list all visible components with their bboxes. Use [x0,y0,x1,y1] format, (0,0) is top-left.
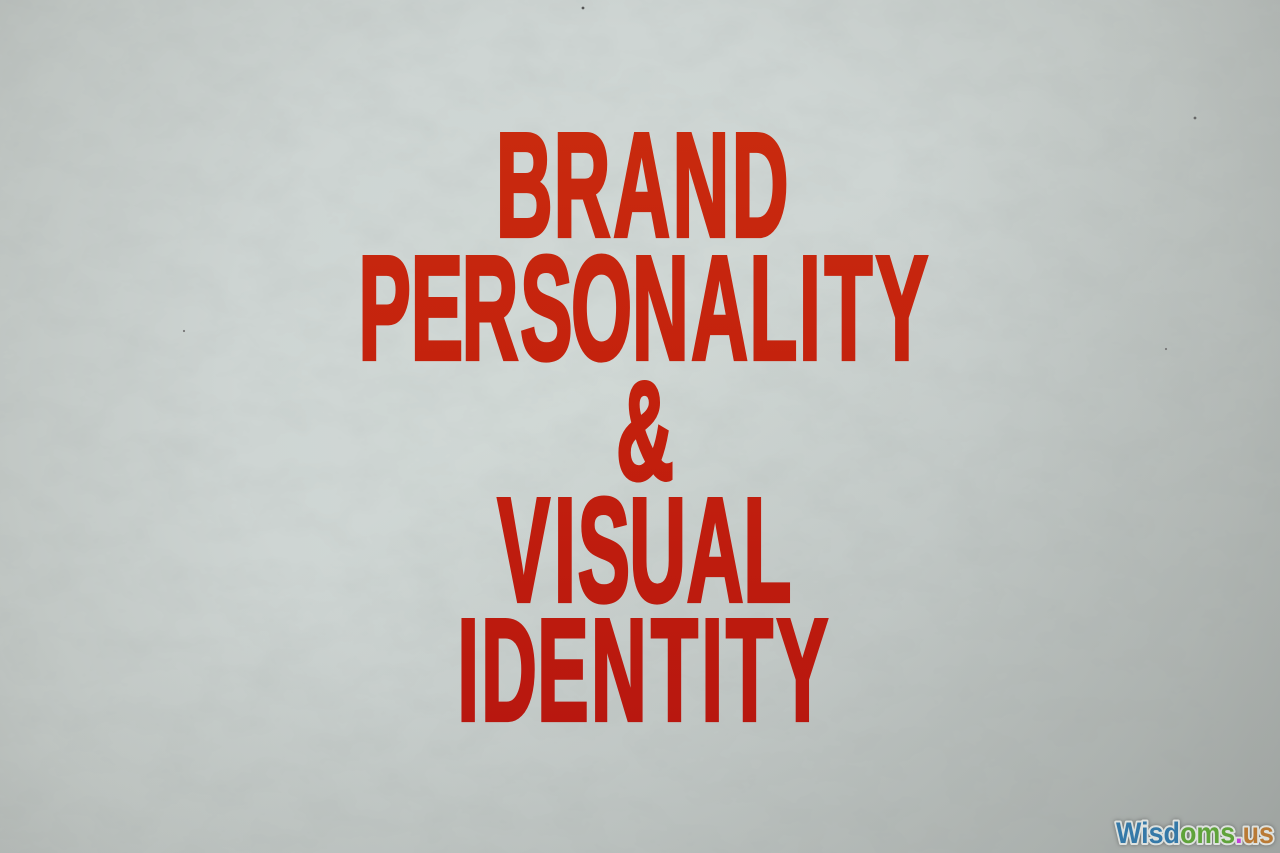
title line: ampersand: & [616,354,674,510]
title line: PERSONALITY: PERSONALITY [358,227,928,391]
title line: BRAND: BRAND [496,104,788,268]
title line: VISUAL: VISUAL [498,469,791,633]
title line: IDENTITY: IDENTITY [457,589,828,751]
watermark logo: Wisdoms.us: Wisdoms.us [1116,817,1274,850]
title: Brand Personality & Visual Identity [358,104,928,751]
